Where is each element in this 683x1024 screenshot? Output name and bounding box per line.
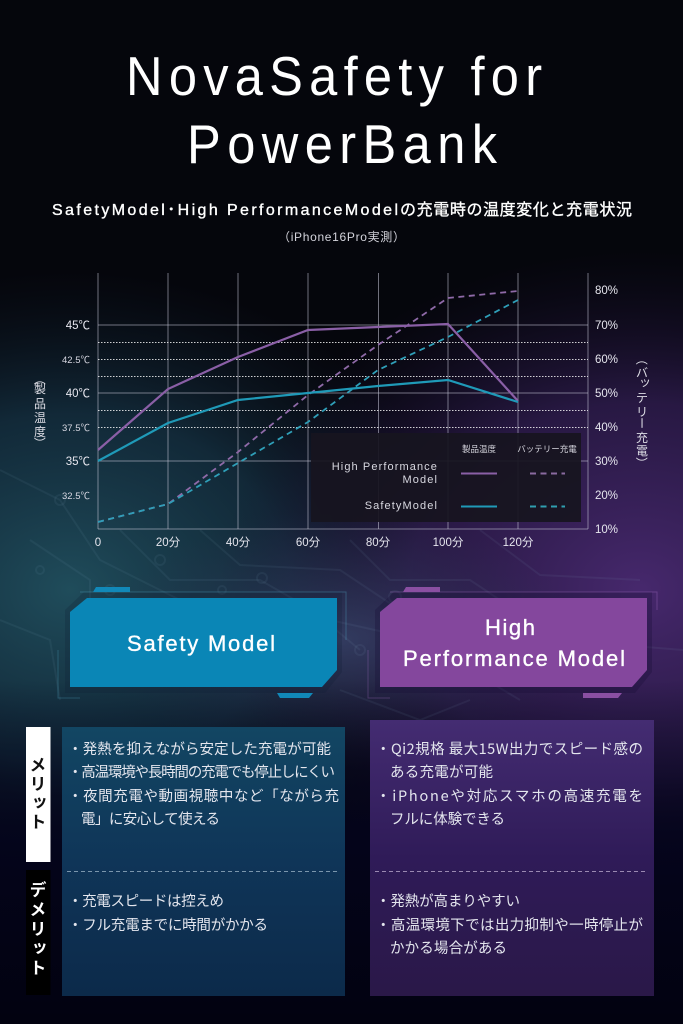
left axis title: 品	[34, 395, 46, 412]
safety merits: ・発熱を抑えながら安定した充電が可能	[68, 738, 332, 759]
high performance merits: ある充電が可能	[390, 761, 494, 782]
left axis title: 温	[34, 409, 46, 426]
right axis title: リ	[636, 403, 648, 420]
right axis title: ）	[633, 457, 650, 469]
x axis labels: 20分	[156, 536, 181, 549]
merit label: メリット	[26, 756, 50, 832]
model badge: high performance: High	[485, 615, 535, 640]
legend: SafetyModel	[365, 500, 438, 512]
high performance demerits: ・発熱が高まりやすい	[376, 890, 520, 911]
right axis title: バ	[636, 364, 648, 381]
safety battery line	[98, 300, 518, 522]
safety merits: 電」に安心して使える	[81, 808, 220, 829]
legend: 製品温度	[462, 443, 496, 455]
high performance demerits: かかる場合がある	[390, 937, 507, 958]
left axis labels: 37.5℃	[62, 423, 90, 434]
x axis labels: 60分	[296, 536, 321, 549]
left axis labels: 35℃	[66, 456, 90, 468]
safety merits: ・高温環境や長時間の充電でも停止しにくい	[68, 761, 335, 782]
left axis labels: 32.5℃	[62, 491, 90, 502]
right axis labels: 40%	[595, 422, 618, 434]
right axis labels: 80%	[595, 285, 618, 297]
panel: high performance model	[370, 720, 654, 996]
title: NovaSafety for	[126, 46, 542, 107]
right axis labels: 50%	[595, 388, 618, 400]
high performance demerits	[376, 890, 644, 958]
right axis title: 充	[636, 429, 648, 446]
high performance demerits: ・高温環境下では出力抑制や一時停止が	[376, 914, 644, 935]
left axis labels: 42.5℃	[62, 355, 90, 366]
line chart	[31, 273, 651, 549]
subtitle: SafetyModel･High PerformanceModel	[52, 202, 398, 219]
right axis labels: 30%	[595, 456, 618, 468]
model badge: high performance	[368, 587, 657, 698]
merit label	[26, 727, 50, 862]
right axis labels: 60%	[595, 354, 618, 366]
x axis labels: 80分	[366, 536, 391, 549]
left axis title	[31, 373, 48, 449]
high performance merits: ・Qi2規格 最大15W出力でスピード感の	[376, 738, 643, 759]
right axis labels	[595, 285, 618, 536]
legend	[332, 443, 577, 512]
x axis labels: 100分	[433, 536, 464, 549]
panel: safety model	[62, 727, 345, 996]
title	[126, 46, 542, 175]
x axis labels	[95, 536, 534, 549]
x axis labels: 120分	[503, 536, 534, 549]
legend panel	[311, 433, 581, 522]
high performance battery line	[98, 291, 518, 522]
left axis title: 度	[34, 423, 46, 440]
x axis labels: 40分	[226, 536, 251, 549]
left axis title: ）	[31, 437, 48, 449]
safety temperature line	[98, 380, 518, 461]
right axis title: 電	[636, 442, 648, 459]
chart grid	[98, 273, 588, 529]
title: PowerBank	[187, 114, 498, 175]
legend: Model	[403, 474, 438, 486]
left axis title: （	[31, 373, 48, 385]
subtitle note: （iPhone16Pro実測）	[278, 230, 405, 244]
legend: High Performance	[332, 461, 438, 473]
safety demerits	[68, 890, 268, 935]
safety demerits: ・充電スピードは控えめ	[68, 890, 224, 911]
right axis labels: 20%	[595, 490, 618, 502]
high performance merits: ・iPhoneや対応スマホの高速充電を	[376, 785, 643, 806]
high performance merits: フルに体験できる	[390, 808, 505, 829]
right axis title: （	[633, 353, 650, 365]
left axis title: 製	[34, 380, 46, 397]
right axis title: テ	[636, 389, 648, 406]
left axis labels	[62, 320, 90, 502]
right axis labels: 10%	[595, 524, 618, 536]
right axis title: ー	[633, 417, 650, 429]
model badge: high performance: Performance Model	[403, 646, 625, 671]
legend: バッテリー充電	[517, 443, 577, 455]
safety merits: ・夜間充電や動画視聴中など「ながら充	[68, 785, 339, 806]
subtitle: の充電時の温度変化と充電状況	[400, 196, 632, 220]
high performance temperature line	[98, 324, 518, 450]
right axis title: ッ	[639, 373, 651, 390]
model badge: safety	[58, 587, 346, 698]
model badge: safety: Safety Model	[127, 631, 275, 656]
demerit label: デメリット	[26, 880, 50, 978]
safety demerits: ・フル充電までに時間がかかる	[68, 914, 268, 935]
safety merits	[68, 738, 339, 829]
high performance merits	[376, 738, 643, 829]
left axis labels: 45℃	[66, 320, 90, 332]
right axis labels: 70%	[595, 320, 618, 332]
right axis title	[633, 353, 651, 469]
subtitle	[52, 196, 632, 220]
x axis labels: 0	[95, 537, 101, 549]
left axis labels: 40℃	[66, 388, 90, 400]
